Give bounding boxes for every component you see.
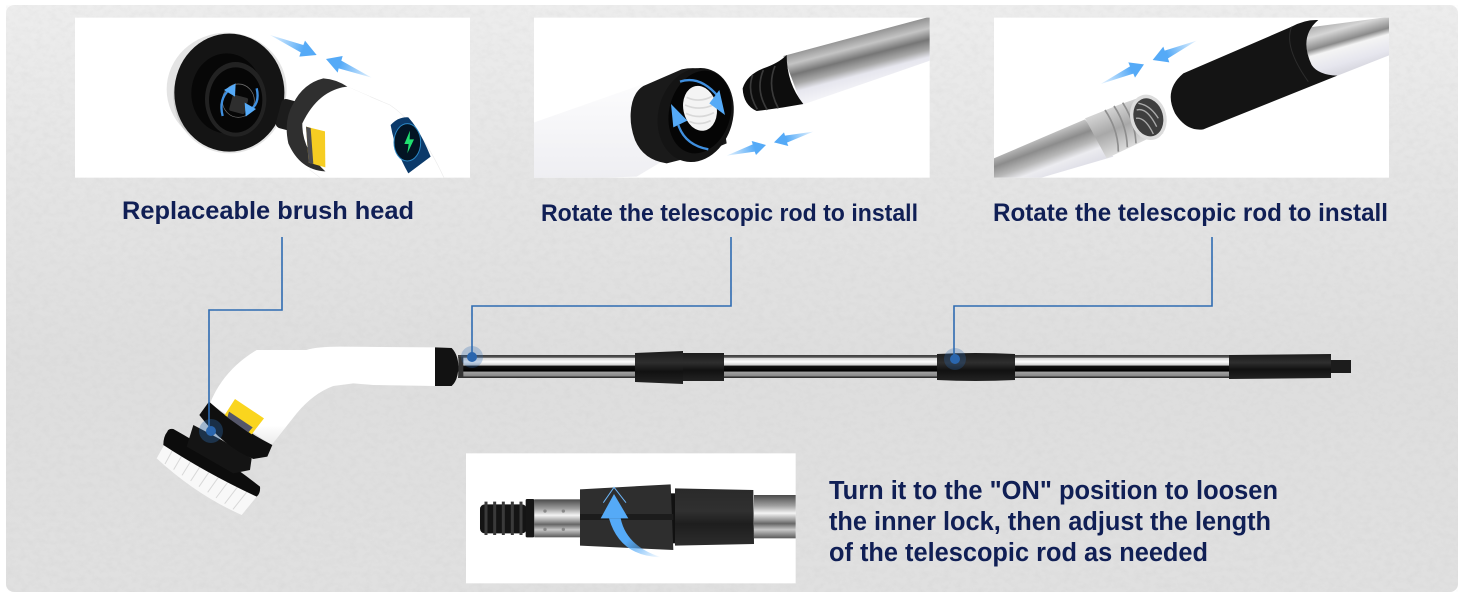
- grip: end sleeve and tip: [1229, 354, 1351, 379]
- panel: rod into handle socket: [527, 17, 930, 180]
- grip: second lock: [937, 353, 1015, 381]
- black threaded socket collar: [630, 68, 734, 164]
- instruction text: Turn it to the "ON" position to loosen: [829, 477, 1278, 505]
- instruction text: [829, 477, 1278, 567]
- telescopic rod assembly: [458, 351, 1351, 384]
- icon: rotation arrows on brush socket: [221, 83, 258, 117]
- arrows pushing together: [1101, 41, 1197, 84]
- brush head disk: [167, 33, 287, 153]
- twist collar: [580, 484, 683, 550]
- telescopic rod with threaded end: [743, 17, 930, 111]
- black head collar: [199, 402, 272, 459]
- grip: first lock: [635, 351, 724, 384]
- callout line: brush head: [199, 237, 282, 443]
- white handle body: [210, 347, 435, 445]
- black rear collar: [435, 347, 458, 386]
- rotation arrows: [671, 80, 725, 149]
- yellow warning label: [225, 399, 264, 434]
- handle with collar, warning label and battery badge: [275, 78, 445, 180]
- arrows pushing together: [727, 132, 813, 156]
- panel: brush head close-up: [75, 18, 470, 180]
- icon: curved up arrow: [601, 487, 662, 557]
- chrome rod right: [754, 495, 796, 538]
- neck: [187, 425, 252, 473]
- left silver rod with threaded socket: [994, 94, 1167, 178]
- heading: rotate rod, middle: Rotate the telescopic rod to install: [541, 200, 918, 227]
- lock sleeve: [675, 488, 754, 546]
- heading: replaceable brush head: Replaceable brush head: [122, 197, 414, 225]
- chrome rod left: [534, 499, 581, 537]
- black brush disk: [163, 429, 260, 497]
- electric scrubber handle and brush: [157, 347, 463, 515]
- panel: rod joint close-up: [990, 17, 1390, 180]
- callout line: first rod joint: [461, 237, 731, 368]
- panel: twist lock close-up: [466, 453, 796, 583]
- callout line: second rod joint: [944, 237, 1212, 370]
- threaded tip: [480, 499, 534, 537]
- white handle body: [534, 119, 660, 178]
- arrows pushing together: [270, 35, 372, 78]
- instruction text: of the telescopic rod as needed: [829, 539, 1208, 567]
- heading: rotate rod, right: Rotate the telescopic rod to install: [993, 199, 1388, 227]
- instruction text: the inner lock, then adjust the length: [829, 508, 1271, 536]
- bristles: [157, 443, 257, 515]
- black rubber grip: [1171, 17, 1390, 130]
